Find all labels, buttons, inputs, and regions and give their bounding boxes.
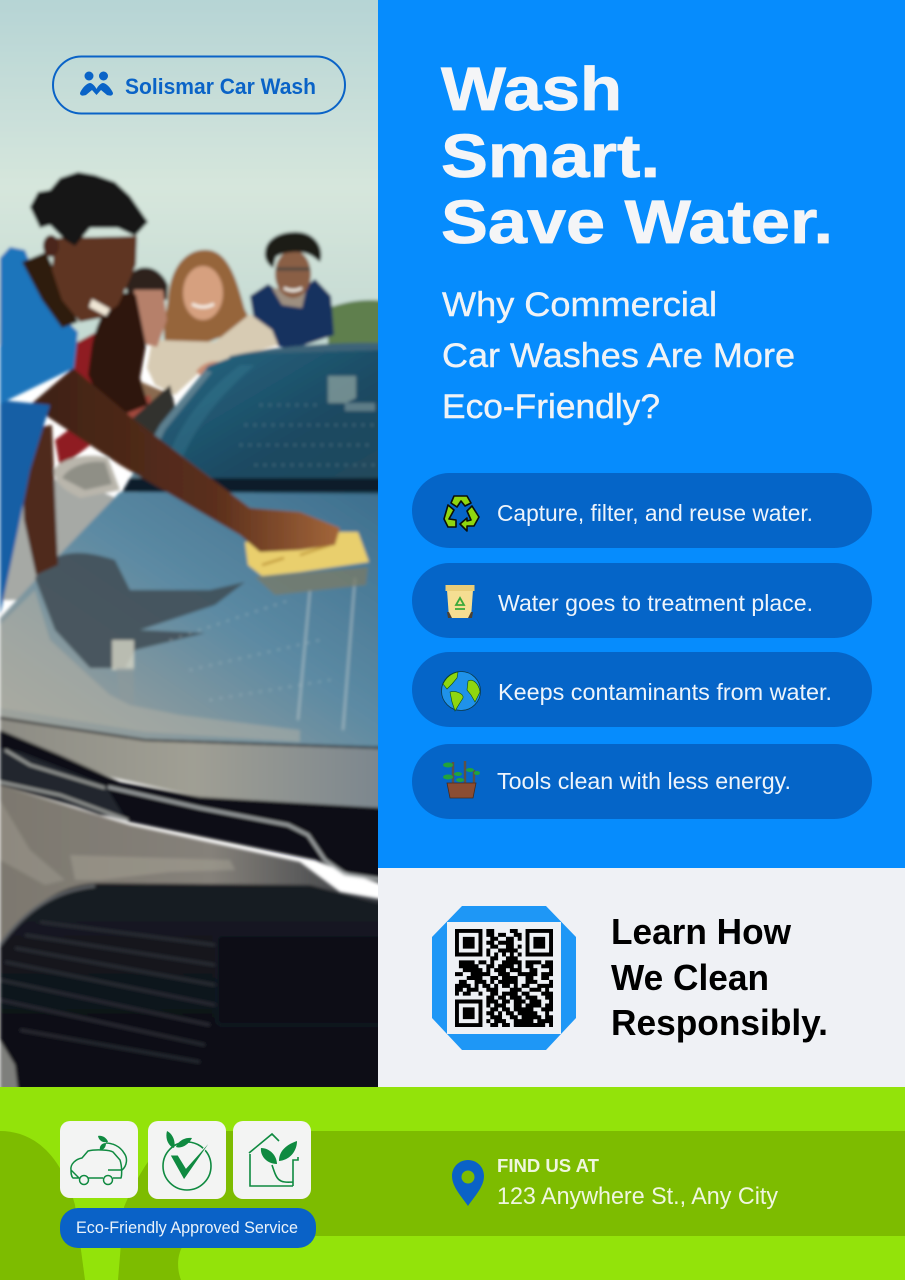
QR call to action text: Learn How	[611, 911, 792, 952]
front grille	[0, 883, 385, 1090]
QR call to action text	[611, 911, 828, 1043]
car hood	[0, 492, 385, 750]
headline: Smart.	[441, 122, 660, 190]
icon: logo people	[80, 72, 113, 96]
benefit: treatment	[412, 563, 872, 638]
panel: footer	[0, 1087, 905, 1280]
car roof and windshield	[228, 342, 378, 360]
icon card: green home	[233, 1121, 311, 1199]
QR code badge	[432, 906, 576, 1050]
icon: globe	[442, 672, 480, 711]
panel: blue content area	[378, 0, 905, 868]
woman with curly hair	[55, 267, 178, 475]
benefit text: Tools clean with less energy.	[497, 768, 791, 794]
subheading: Eco-Friendly?	[442, 388, 660, 426]
headline	[441, 55, 833, 256]
subheading: Why Commercial	[442, 286, 717, 324]
man with glasses	[250, 232, 334, 350]
approved service badge	[60, 1208, 316, 1248]
approved service badge: Eco-Friendly Approved Service	[76, 1219, 298, 1237]
panel: car wash photo	[0, 0, 387, 1090]
background ground and mirror	[0, 480, 120, 600]
headline: Wash	[441, 55, 622, 123]
benefit text: Keeps contaminants from water.	[498, 679, 832, 705]
subheading: Car Washes Are More	[442, 337, 795, 375]
headline: Save Water.	[441, 188, 833, 256]
towel reflection and towel	[255, 567, 368, 595]
benefit: reuse water	[412, 473, 872, 548]
icon card: approved check	[148, 1121, 226, 1199]
lower body panel	[0, 783, 378, 943]
QR call to action text: Responsibly.	[611, 1002, 828, 1043]
address: 123 Anywhere St., Any City	[497, 1183, 778, 1210]
benefit: contaminants	[412, 652, 872, 727]
benefit: energy	[412, 744, 872, 819]
boy washing the car	[0, 172, 340, 615]
logo pill	[53, 56, 345, 114]
QR call to action text: We Clean	[611, 957, 769, 998]
benefit text: Capture, filter, and reuse water.	[497, 500, 813, 526]
bumper strip	[0, 716, 385, 808]
icon: plant pot	[443, 761, 480, 798]
icon: recycling bin	[446, 585, 474, 618]
benefit text: Water goes to treatment place.	[498, 590, 813, 616]
trees	[328, 300, 385, 345]
panel: QR call to action	[378, 868, 905, 1087]
address heading: FIND US AT	[497, 1155, 600, 1176]
icon: recycle	[444, 496, 479, 531]
subheading	[442, 286, 795, 426]
icon card: eco car	[60, 1121, 138, 1198]
dark crease and headlight	[0, 730, 385, 885]
woman in cream sweater	[147, 250, 278, 395]
icon: location pin	[452, 1160, 484, 1206]
logo name: Solismar Car Wash	[125, 74, 316, 99]
